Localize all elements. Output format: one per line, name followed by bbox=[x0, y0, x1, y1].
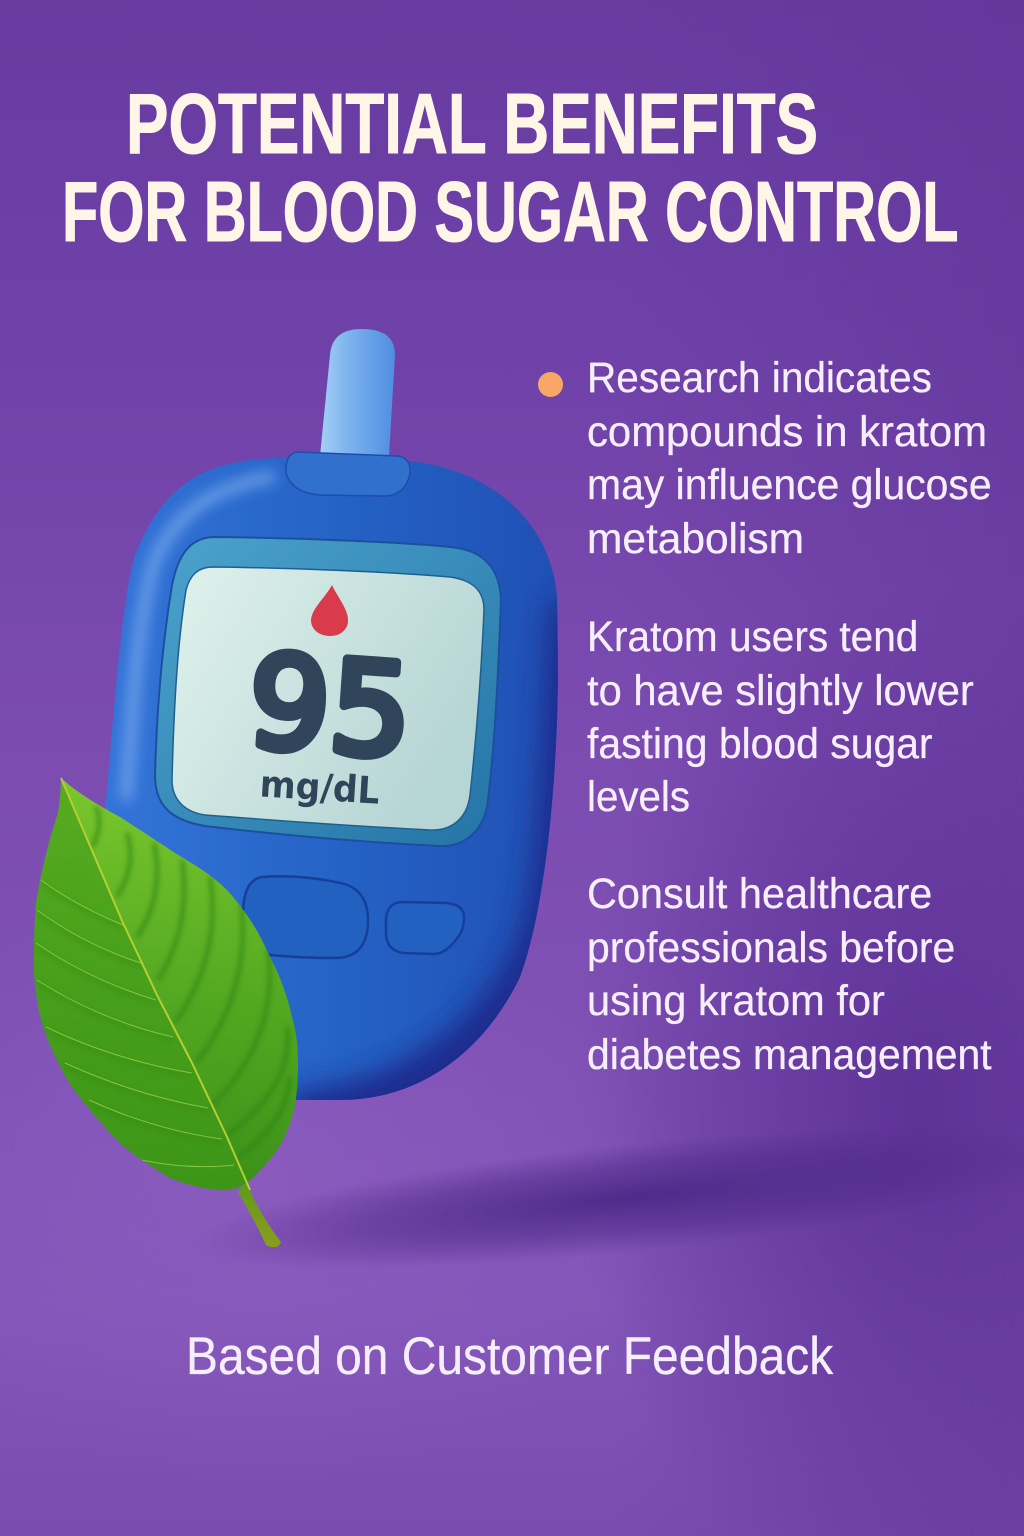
display bezel bbox=[155, 537, 501, 846]
text block: consult: professionals before bbox=[587, 924, 955, 972]
text block: fasting levels: Kratom users tend bbox=[587, 613, 918, 661]
text block: consult: using kratom for bbox=[587, 977, 885, 1025]
title: FOR BLOOD SUGAR CONTROL bbox=[62, 165, 959, 260]
text block: fasting levels bbox=[587, 613, 974, 821]
footer text: Based on Customer Feedback bbox=[186, 1327, 833, 1386]
icon: blood drop bbox=[311, 585, 348, 636]
text block: research: compounds in kratom bbox=[587, 408, 987, 456]
text block: research bbox=[587, 354, 992, 563]
text block: consult bbox=[587, 870, 992, 1079]
text block: consult: Consult healthcare bbox=[587, 870, 932, 918]
unit mg/dL: mg/dL bbox=[259, 762, 381, 813]
text block: research: metabolism bbox=[587, 515, 804, 563]
meter top cap bbox=[286, 452, 410, 496]
left button bbox=[243, 876, 368, 958]
text block: fasting levels: fasting blood sugar bbox=[587, 720, 933, 768]
test strip bbox=[320, 329, 395, 456]
text block: research: may influence glucose bbox=[587, 461, 992, 509]
title: POTENTIAL BENEFITS bbox=[126, 77, 818, 172]
text block: fasting levels: to have slightly lower bbox=[587, 667, 974, 715]
title bbox=[62, 77, 959, 260]
text block: consult: diabetes management bbox=[587, 1031, 992, 1079]
icon: green leaf bbox=[20, 778, 298, 1247]
text block: fasting levels: levels bbox=[587, 773, 690, 821]
reading 95: 95 bbox=[244, 628, 416, 788]
meter body bbox=[105, 458, 558, 1100]
bullet marker bbox=[538, 372, 563, 397]
display screen bbox=[172, 567, 484, 830]
right button bbox=[386, 902, 464, 954]
text block: research: Research indicates bbox=[587, 354, 932, 402]
illustration: glucose meter with leaf bbox=[34, 329, 558, 1248]
